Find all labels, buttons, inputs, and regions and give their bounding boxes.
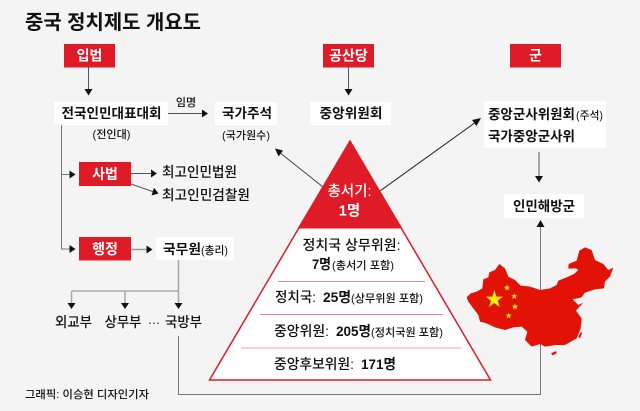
- text: ministries: ···: [148, 315, 160, 330]
- tier: alternate members: 171명: [361, 356, 396, 372]
- title: 중국 정치제도 개요도: [25, 11, 201, 34]
- box: central military commission: 국가중앙군사위: [488, 129, 575, 144]
- arrow: pyramid to military commission: [380, 118, 481, 191]
- box: central military commission: [484, 101, 606, 148]
- text: ministries: 외교부: [55, 314, 92, 330]
- icon: map of China with flag stars: [467, 247, 613, 355]
- box: central military commission: (주석): [576, 109, 603, 122]
- text: ministries: [55, 314, 202, 330]
- arrow: administration to state council: [131, 246, 152, 254]
- tier: politburo: 정치국:: [275, 289, 316, 305]
- connector: state council to ministries: [68, 260, 182, 309]
- pyramid top: general secretary: 1명: [339, 202, 360, 220]
- tier: central committee members: 중앙위원:: [274, 323, 329, 339]
- box: central committee: [310, 102, 391, 125]
- text: supreme people's court: 최고인민법원: [162, 164, 237, 180]
- heading: legislature: [64, 44, 115, 68]
- tier: alternate members: [274, 356, 396, 372]
- arrow: legislature to national congress: [84, 67, 92, 96]
- arrow: pyramid to state president: [275, 148, 323, 187]
- text: supreme people's procuratorate: 최고인민검찰원: [162, 187, 250, 203]
- box: state president: [215, 102, 277, 125]
- pyramid top: general secretary: 총서기:: [327, 183, 372, 200]
- tier: politburo: [275, 289, 423, 305]
- box: national people's congress: [54, 102, 168, 125]
- pyramid base: [210, 141, 490, 380]
- tier: central committee members: [274, 323, 443, 339]
- box: national people's congress: 전국인민대표대회: [62, 106, 162, 121]
- box: state president: 국가주석: [222, 106, 272, 121]
- heading: military: 군: [529, 48, 542, 64]
- heading: administration: 행정: [92, 241, 118, 257]
- arrow: commission to liberation army: [535, 152, 543, 182]
- tier: central committee members: 205명: [336, 323, 371, 339]
- heading: communist party: 공산당: [329, 48, 368, 64]
- heading: legislature: 입법: [77, 48, 102, 64]
- arrow: appointment: 임명: [176, 96, 196, 109]
- connector: congress to judiciary and administration: [62, 125, 76, 253]
- text: graphic credit: 그래픽: 이승현 디자인기자: [25, 388, 149, 401]
- tier: alternate members: 중앙후보위원:: [274, 356, 354, 372]
- text: ministries: 상무부: [104, 314, 142, 330]
- heading: administration: [79, 237, 131, 260]
- box: state council: [156, 237, 234, 260]
- heading: judiciary: [79, 162, 131, 186]
- box: state council: (총리): [201, 244, 228, 257]
- arrow: judiciary to supreme court: [131, 170, 157, 178]
- connector: ministry of defence to people's liberation army: [178, 220, 544, 394]
- tier: politburo standing committee: [302, 237, 400, 272]
- arrow: appointment: [168, 96, 208, 118]
- tier: politburo: (상무위원 포함): [351, 291, 423, 305]
- box: central committee: 중앙위원회: [320, 106, 382, 121]
- box: people's liberation army: 인민해방군: [513, 199, 575, 214]
- arrow: party to central committee: [344, 67, 352, 96]
- tier: politburo: 25명: [323, 289, 351, 305]
- text: head of state: (국가원수): [222, 128, 270, 142]
- box: central military commission: 중앙군사위원회: [488, 107, 575, 122]
- tier: central committee members: (정치국원 포함): [371, 325, 443, 339]
- heading: military: [510, 44, 561, 68]
- heading: judiciary: 사법: [92, 166, 118, 182]
- arrow: judiciary to supreme procuratorate: [131, 184, 158, 196]
- tier: politburo standing committee: (총서기 포함): [332, 258, 394, 272]
- tier: politburo standing committee: 정치국 상무위원:: [302, 237, 400, 253]
- box: state council: 국무원: [163, 242, 201, 257]
- heading: communist party: [323, 44, 374, 68]
- box: people's liberation army: [504, 194, 584, 218]
- pyramid: [210, 141, 490, 380]
- text: ministries: 국방부: [165, 314, 202, 330]
- tier: politburo standing committee: 7명: [312, 256, 331, 272]
- text: NPC abbreviation: (전인대): [92, 127, 130, 141]
- pyramid top: general secretary: [298, 141, 402, 228]
